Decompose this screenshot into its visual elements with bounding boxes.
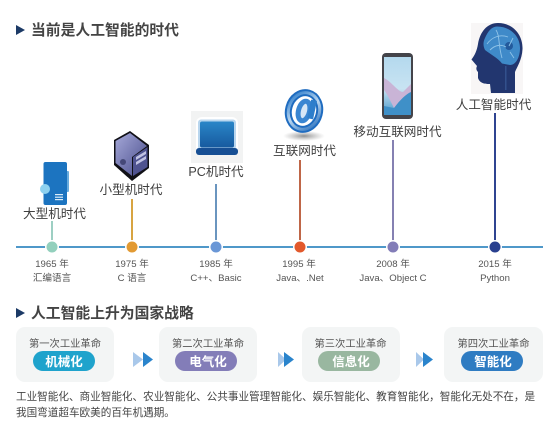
panel: second industrial revolution <box>159 327 257 382</box>
node <box>125 240 139 254</box>
year and language <box>190 258 242 284</box>
stem <box>392 140 394 247</box>
year and language: 1965 年 <box>35 258 69 270</box>
icon: smartphone <box>382 53 413 119</box>
arrow 3 <box>416 352 433 367</box>
era: mobile internet 2008 <box>353 53 442 284</box>
node <box>45 240 59 254</box>
era: mainframe 1965 <box>23 162 86 284</box>
year and language: Python <box>480 273 510 284</box>
pill: mechanization: 机械化 <box>45 354 83 369</box>
year and language: C 语言 <box>118 272 147 284</box>
arrow 2 <box>278 352 294 367</box>
icon: mainframe <box>40 162 69 205</box>
pill: electrification: 电气化 <box>189 354 227 369</box>
icon: brain head <box>471 23 523 94</box>
year and language: 2015 年 <box>478 258 512 270</box>
node <box>293 240 307 254</box>
stem <box>215 184 217 247</box>
label: minicomputer era: 小型机时代 <box>100 183 163 197</box>
year and language: 1995 年 <box>282 258 316 270</box>
stem <box>494 113 496 247</box>
label: AI era: 人工智能时代 <box>456 98 532 112</box>
stem <box>51 221 53 247</box>
year and language <box>115 258 149 284</box>
label: mainframe era: 大型机时代 <box>23 207 86 221</box>
stem <box>299 160 301 247</box>
node <box>209 240 223 254</box>
pill: intelligentization: 智能化 <box>474 354 512 369</box>
panel: fourth industrial revolution <box>444 327 543 382</box>
icon: at sign <box>283 89 325 141</box>
year and language <box>359 258 427 284</box>
body text: 工业智能化、商业智能化、农业智能化、公共事业管理智能化、娱乐智能化、教育智能化，智能化无处不在，是 <box>16 390 535 403</box>
panel: first industrial revolution <box>16 327 114 382</box>
year and language <box>276 258 324 284</box>
era: PC 1985 <box>188 111 244 284</box>
body text: 我国弯道超车欧美的百年机遇期。 <box>16 406 175 419</box>
label: PC era: PC机时代 <box>188 165 244 179</box>
timeline axis <box>16 246 543 248</box>
pill: informatization: 信息化 <box>332 354 370 369</box>
year and language: 汇编语言 <box>33 272 72 284</box>
year and language <box>33 258 72 284</box>
heading: national strategy: 人工智能上升为国家战略 <box>31 304 194 322</box>
node <box>488 240 502 254</box>
label: internet era: 互联网时代 <box>273 144 336 158</box>
body text <box>16 390 535 419</box>
year and language: C++、Basic <box>190 273 242 284</box>
panel: fourth industrial revolution: 第四次工业革命 <box>457 337 530 350</box>
arrow 1 <box>133 352 153 367</box>
year and language: 1975 年 <box>115 258 149 270</box>
icon: server tower <box>114 131 149 181</box>
node <box>386 240 400 254</box>
year and language <box>478 258 512 284</box>
label: mobile internet era: 移动互联网时代 <box>353 125 442 139</box>
icon: laptop <box>191 111 243 163</box>
year and language: 2008 年 <box>376 258 410 270</box>
year and language: Java、Object C <box>359 273 427 284</box>
era: internet 1995 <box>273 89 336 284</box>
year and language: 1985 年 <box>199 258 233 270</box>
year and language: Java、.Net <box>276 273 324 284</box>
stem <box>131 199 133 247</box>
era: AI 2015 <box>456 23 532 284</box>
panel: second industrial revolution: 第二次工业革命 <box>172 337 244 350</box>
panel: first industrial revolution: 第一次工业革命 <box>29 337 101 350</box>
panel: third industrial revolution <box>302 327 400 382</box>
heading: AI era: 当前是人工智能的时代 <box>31 21 179 39</box>
era: minicomputer 1975 <box>100 131 163 284</box>
panel: third industrial revolution: 第三次工业革命 <box>314 337 387 350</box>
